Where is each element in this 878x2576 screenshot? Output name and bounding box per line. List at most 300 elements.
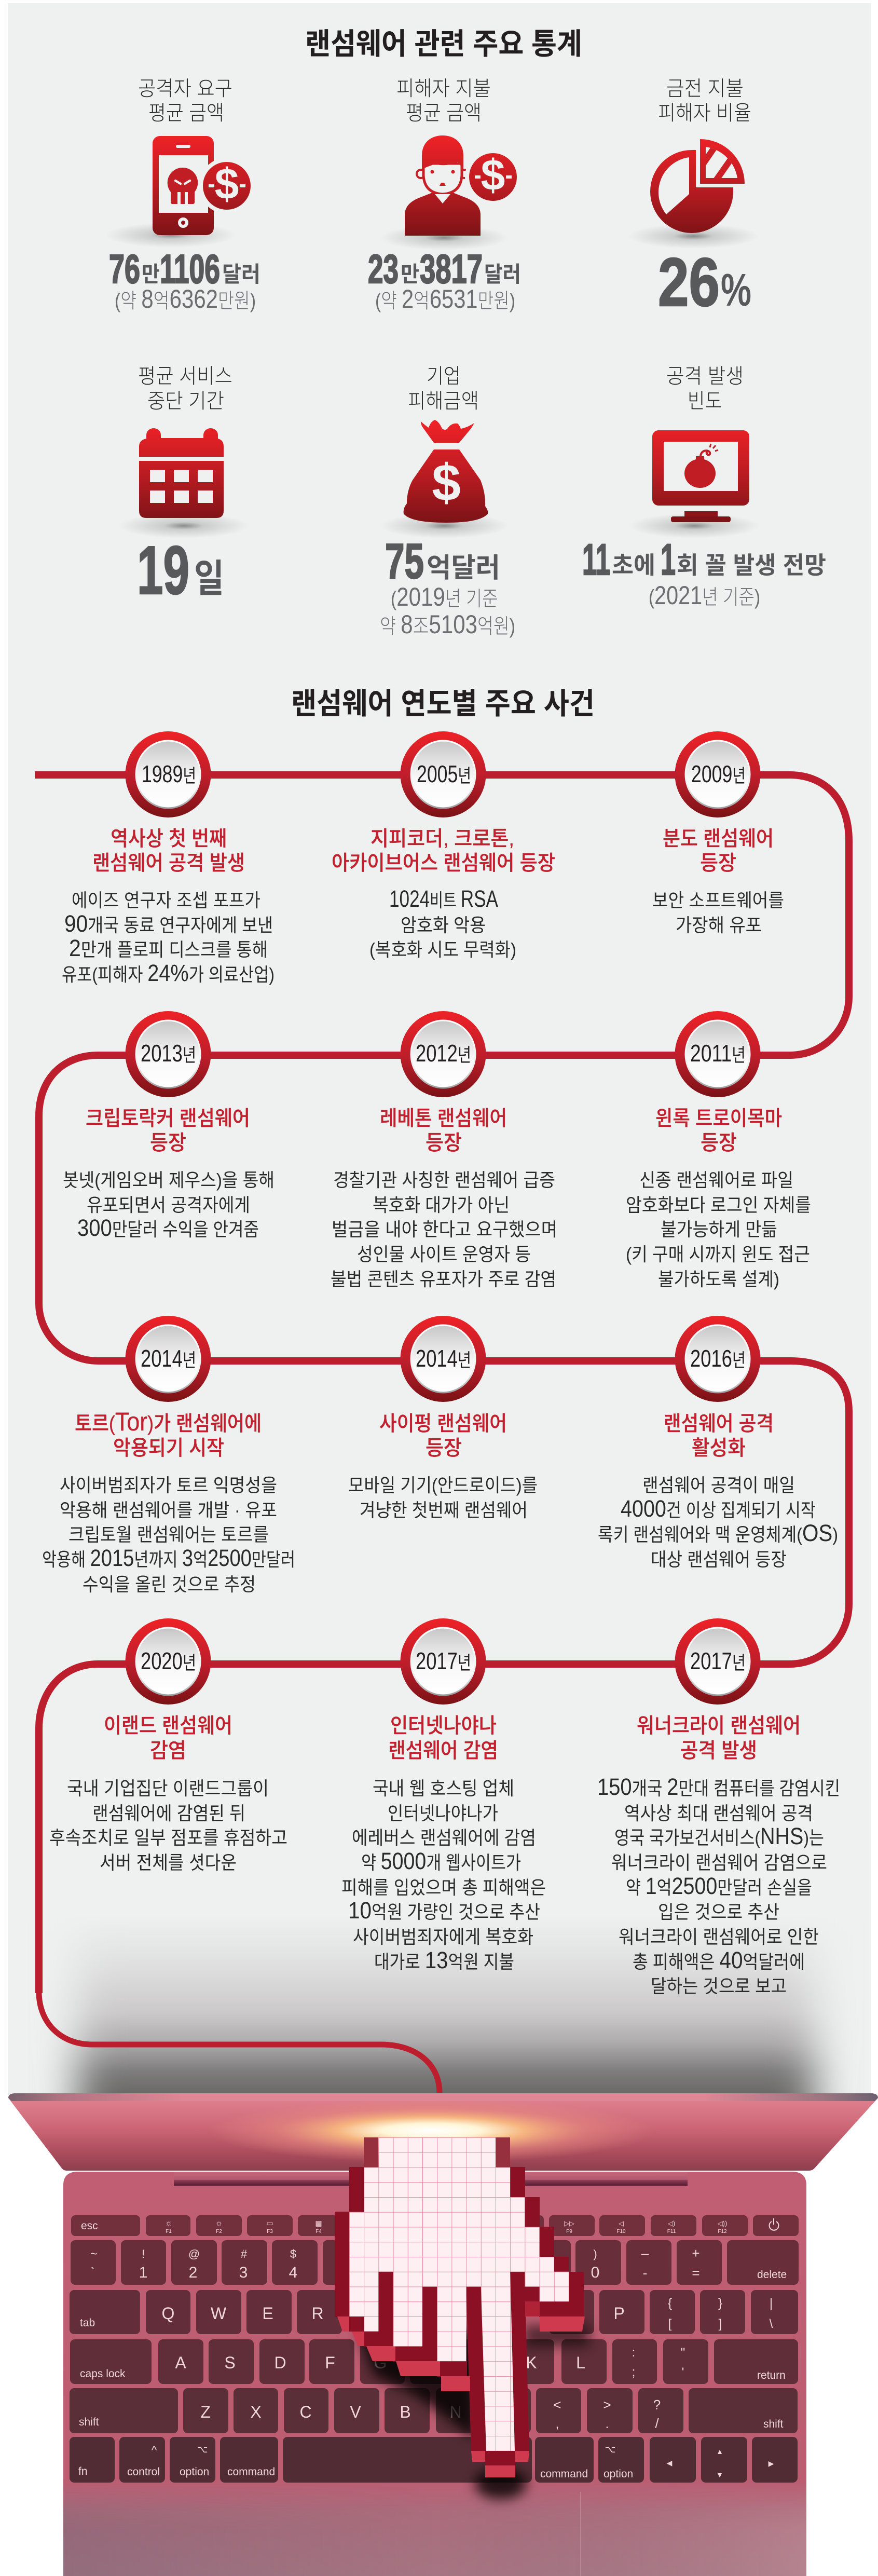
key labels: ~	[90, 2247, 98, 2261]
key labels: ⌥	[605, 2444, 615, 2455]
description	[49, 1778, 287, 1873]
event: 2017 Erebus	[341, 1618, 546, 1973]
icon: calendar	[118, 428, 249, 538]
title: 이랜드 랜섬웨어	[104, 1714, 232, 1737]
event: 2005	[332, 731, 555, 960]
year badge	[675, 1011, 761, 1097]
year badge: 2012년	[416, 1040, 471, 1067]
laptop lid	[8, 2093, 878, 2171]
key labels: X	[250, 2403, 262, 2421]
description	[369, 885, 516, 960]
stat: attack frequency	[582, 365, 826, 610]
key labels: {	[668, 2296, 672, 2310]
description: 모바일 기기(안드로이드)를	[348, 1475, 538, 1496]
description: 국내 웹 호스팅 업체	[373, 1778, 514, 1799]
hand white pixels	[349, 2137, 569, 2451]
description: 에이즈 연구자 조셉 포프가	[72, 890, 260, 911]
key labels: command	[227, 2466, 275, 2478]
value note: (2019년 기준	[391, 582, 498, 611]
label	[396, 77, 491, 125]
value: 23	[368, 246, 399, 292]
description: 복호화 대가가 아닌	[373, 1194, 510, 1216]
description: 랜섬웨어에 감염된 뒤	[92, 1803, 245, 1824]
title: 등장	[426, 1132, 462, 1154]
key labels: )	[593, 2247, 597, 2260]
key labels: return	[757, 2369, 786, 2381]
value: 초에	[612, 552, 655, 579]
title: 지피코더, 크로톤,	[371, 827, 514, 850]
description: 인터넷나야나가	[388, 1803, 498, 1824]
key labels: ▷▷	[564, 2219, 574, 2227]
title	[663, 827, 774, 875]
key labels: ^	[152, 2444, 157, 2457]
description	[626, 1169, 811, 1290]
hand shadow	[358, 2325, 589, 2499]
description: 봇넷(게임오버 제우스)을 통해	[63, 1169, 275, 1191]
icon: pie chart	[638, 139, 748, 247]
value in won: (약 8억6362만원)	[115, 284, 256, 314]
description: 크립토월 랜섬웨어는 토르를	[68, 1524, 269, 1545]
key labels: =	[692, 2265, 700, 2281]
key labels: 4	[289, 2264, 297, 2281]
description: 사이버범죄자에게 복호화	[353, 1926, 533, 1947]
description: 악용해 2015년까지 3억2500만달러	[42, 1545, 295, 1571]
key labels: !	[142, 2247, 145, 2260]
key labels: option	[603, 2468, 633, 2480]
key labels: F2	[216, 2229, 222, 2234]
description: 4000건 이상 집계되기 시작	[621, 1495, 816, 1522]
key labels: 3	[239, 2264, 248, 2281]
title: 토르(Tor)가 랜섬웨어에	[75, 1407, 262, 1436]
description: 달하는 것으로 보고	[651, 1975, 787, 1997]
description: 랜섬웨어 공격이 매일	[642, 1475, 795, 1496]
value: 11	[582, 535, 610, 584]
key labels: ◁	[619, 2219, 624, 2227]
year badge	[675, 731, 761, 817]
description: (복호화 시도 무력화)	[369, 939, 516, 960]
description: 겨냥한 첫번째 랜섬웨어	[360, 1500, 528, 1521]
description: 영국 국가보건서비스(NHS)는	[614, 1823, 824, 1849]
key labels: :	[632, 2346, 635, 2360]
key labels: /	[655, 2416, 659, 2431]
value: 달러	[484, 262, 521, 287]
year badge	[401, 1316, 486, 1402]
description	[341, 1778, 546, 1973]
value note	[380, 582, 515, 639]
description: 피해를 입었으며 총 피해액은	[341, 1877, 546, 1898]
value: 76	[109, 246, 140, 292]
key labels: –	[641, 2245, 649, 2261]
title	[664, 1412, 774, 1460]
title: 활성화	[692, 1437, 746, 1460]
label: 피해자 비율	[658, 102, 751, 125]
hand side walls	[335, 2137, 584, 2466]
key labels: Z	[200, 2403, 211, 2421]
key labels: ▦	[315, 2219, 322, 2227]
description: 에레버스 랜섬웨어에 감염	[352, 1827, 536, 1848]
value: 만	[401, 262, 419, 287]
label: 공격 발생	[666, 365, 744, 388]
icon: money bag: $	[432, 454, 461, 512]
value: 1106	[160, 246, 220, 292]
year badge: 2017년	[416, 1647, 471, 1674]
value: %	[721, 264, 751, 316]
key labels: ;	[632, 2365, 635, 2379]
description	[42, 1475, 295, 1595]
key labels: esc	[81, 2220, 98, 2232]
title: 윈록 트로이목마	[655, 1107, 782, 1130]
title: 공격 발생	[680, 1739, 757, 1762]
key labels: G	[374, 2353, 387, 2372]
value: 1	[661, 535, 676, 584]
description	[62, 890, 275, 986]
description	[331, 1169, 557, 1290]
key labels: "	[681, 2346, 685, 2360]
icon: phone with skull and dollar	[105, 136, 255, 248]
label: 평균 금액	[406, 102, 482, 125]
key labels: ▲	[716, 2447, 723, 2456]
key labels: ,	[556, 2417, 559, 2431]
key labels: command	[540, 2468, 588, 2480]
label: 중단 기간	[147, 390, 224, 413]
key labels: F4	[315, 2229, 322, 2234]
description	[63, 1169, 275, 1241]
key labels: tab	[80, 2317, 95, 2329]
key labels: W	[211, 2304, 227, 2323]
description: 불가능하게 만듦	[661, 1219, 777, 1240]
year badge: 2017년	[690, 1647, 746, 1674]
icon: person with dollar: $	[481, 151, 505, 199]
description	[597, 1774, 840, 1997]
year badge: 2020년	[141, 1647, 196, 1674]
description: 워너크라이 랜섬웨어 감염으로	[611, 1852, 827, 1873]
key labels: |	[770, 2296, 773, 2310]
key labels: shift	[79, 2416, 99, 2428]
description: 보안 소프트웨어를	[652, 890, 784, 911]
description	[598, 1475, 838, 1570]
year badge	[126, 1316, 211, 1402]
key labels: +	[692, 2245, 700, 2261]
description: 록키 랜섬웨어와 맥 운영체계(OS)	[598, 1520, 838, 1546]
description: 역사상 최대 랜섬웨어 공격	[624, 1803, 813, 1824]
key labels: $	[290, 2247, 296, 2260]
label: 기업	[427, 365, 461, 388]
description: 2만개 플로피 디스크를 통해	[69, 935, 268, 961]
title: 인터넷나야나	[390, 1714, 497, 1737]
title: 크립토락커 랜섬웨어	[86, 1107, 250, 1130]
year badge	[401, 1011, 486, 1097]
title: 악용되기 시작	[113, 1437, 224, 1460]
title: 사이펑 랜섬웨어	[379, 1412, 507, 1435]
event: 2020	[49, 1618, 287, 1873]
value	[368, 246, 521, 292]
description: 워너크라이 랜섬웨어로 인한	[619, 1926, 819, 1947]
year badge: 2016년	[690, 1345, 746, 1372]
event: 2016	[598, 1316, 838, 1570]
value	[385, 534, 500, 589]
key labels: ◀	[667, 2459, 673, 2467]
title	[379, 1412, 507, 1460]
key labels: ☼	[215, 2219, 223, 2228]
key labels: E	[262, 2304, 273, 2323]
event: 2009	[652, 731, 784, 936]
title: 역사상 첫 번째	[111, 827, 227, 850]
title	[388, 1714, 498, 1762]
label	[408, 365, 479, 413]
description: 암호화보다 로그인 자체를	[626, 1194, 811, 1216]
title	[86, 1107, 250, 1154]
event: 2017 WannaCry	[597, 1618, 840, 1997]
shadow above laptop	[78, 1915, 815, 2093]
description: 국내 기업집단 이랜드그룹이	[67, 1778, 269, 1799]
title: 등장	[701, 1132, 737, 1154]
key labels: 0	[591, 2264, 599, 2281]
description: 90개국 동료 연구자에게 보낸	[64, 910, 273, 937]
key labels: ⌥	[197, 2444, 208, 2455]
title	[637, 1714, 801, 1762]
value: 억달러	[427, 553, 500, 583]
stat: average downtime	[118, 365, 249, 608]
title: 등장	[700, 852, 736, 875]
description: 암호화 악용	[401, 915, 486, 936]
event: 2013	[63, 1011, 275, 1241]
event: 2011	[626, 1011, 811, 1290]
icon: monitor with bomb	[629, 430, 760, 538]
key labels: }	[718, 2296, 722, 2310]
key labels: R	[311, 2304, 324, 2323]
label	[666, 365, 744, 413]
year badge: 2013년	[141, 1040, 196, 1067]
description: 유포(피해자 24%가 의료산업)	[62, 960, 275, 986]
title: 등장	[426, 1437, 462, 1460]
description: 150개국 2만대 컴퓨터를 감염시킨	[597, 1774, 840, 1800]
description: 입은 것으로 추산	[658, 1901, 779, 1923]
panel: background	[8, 3, 871, 2095]
description: 불법 콘텐츠 유포자가 주로 감염	[331, 1269, 556, 1290]
label: 빈도	[688, 390, 722, 413]
key labels: -	[643, 2265, 647, 2281]
key labels: F11	[667, 2229, 676, 2234]
key labels: F3	[267, 2229, 273, 2234]
description	[652, 890, 784, 936]
title: 랜섬웨어 공격 발생	[92, 852, 245, 875]
icon: pixel hand cursor	[335, 2137, 589, 2499]
value in won: (약 2억6531만원)	[375, 284, 515, 314]
key labels: '	[682, 2365, 684, 2379]
description: 불가하도록 설계)	[658, 1269, 779, 1290]
key labels: \	[770, 2317, 773, 2331]
description: 300만달러 수익을 안겨줌	[77, 1215, 259, 1241]
title: 워너크라이 랜섬웨어	[637, 1714, 801, 1737]
key labels: @	[188, 2247, 200, 2260]
year badge	[675, 1316, 761, 1402]
key labels: F	[325, 2353, 335, 2372]
value note: 약 8조5103억원)	[380, 610, 515, 639]
title	[655, 1107, 782, 1154]
value: 일	[194, 557, 224, 600]
description: 약 5000개 웹사이트가	[361, 1848, 521, 1874]
description: 수익을 올린 것으로 추정	[83, 1574, 256, 1595]
event: 1989	[62, 731, 275, 986]
label: 피해금액	[408, 390, 479, 413]
description: 가장해 유포	[676, 915, 762, 936]
key labels: caps lock	[80, 2368, 126, 2380]
value: 26	[658, 244, 720, 320]
title: 랜섬웨어 공격	[664, 1412, 774, 1435]
year badge: 1989년	[142, 760, 196, 787]
value: 달러	[222, 262, 260, 287]
title: 감염	[150, 1739, 186, 1762]
year badge: 2009년	[691, 760, 746, 787]
key labels: C	[299, 2403, 312, 2421]
icon: phone with skull and dollar: $	[215, 159, 239, 208]
description: 서버 전체를 셧다운	[100, 1852, 237, 1873]
stat: average ransom demanded	[105, 77, 260, 314]
key labels: shift	[763, 2418, 784, 2430]
icon: money bag	[380, 420, 509, 538]
label	[138, 77, 232, 125]
stat: average paid by victims	[368, 77, 521, 314]
key labels: [	[668, 2317, 672, 2331]
label: 평균 금액	[148, 102, 224, 125]
keyboard	[70, 2215, 799, 2483]
description: 약 1억2500만달러 손실을	[626, 1873, 812, 1899]
value: 3817	[420, 246, 483, 292]
key labels	[78, 2218, 787, 2480]
key labels: P	[613, 2304, 625, 2323]
key labels: ▼	[716, 2471, 723, 2479]
value: 19	[137, 532, 189, 608]
key labels: ◁)	[668, 2219, 675, 2227]
description: 대상 랜섬웨어 등장	[651, 1549, 787, 1570]
key labels: 1	[139, 2264, 147, 2281]
key labels: option	[180, 2466, 209, 2478]
title: 분도 랜섬웨어	[663, 827, 774, 850]
year badge	[401, 1618, 486, 1705]
key labels: #	[241, 2247, 248, 2260]
key labels: S	[224, 2353, 236, 2372]
key labels: B	[400, 2403, 411, 2421]
description: 후속조치로 일부 점포를 휴점하고	[49, 1827, 287, 1848]
year badge	[401, 731, 486, 817]
description: 10억원 가량인 것으로 추산	[348, 1897, 540, 1924]
year badge	[126, 1618, 211, 1705]
description: (키 구매 시까지 윈도 접근	[626, 1244, 810, 1265]
event: 2012	[331, 1011, 557, 1290]
title	[332, 827, 555, 875]
key labels: ◁))	[718, 2219, 727, 2227]
key labels: >	[603, 2397, 611, 2413]
value note: (2021년 기준)	[649, 581, 760, 610]
title	[380, 1107, 507, 1154]
description: 유포되면서 공격자에게	[87, 1194, 250, 1216]
key labels: ]	[719, 2317, 722, 2331]
key labels: V	[350, 2403, 361, 2421]
label: 금전 지불	[666, 77, 744, 100]
description: 성인물 사이트 운영자 등	[357, 1244, 531, 1265]
year badge	[126, 1011, 211, 1097]
key labels: F1	[166, 2229, 172, 2234]
year badge	[675, 1618, 761, 1705]
key labels: .	[606, 2417, 609, 2431]
description: 사이버범죄자가 토르 익명성을	[60, 1475, 277, 1496]
value: 만	[142, 262, 160, 287]
heading: timeline: 랜섬웨어 연도별 주요 사건	[291, 687, 595, 720]
key labels: ?	[653, 2397, 661, 2413]
key labels: ☼	[165, 2219, 172, 2228]
description	[348, 1475, 538, 1521]
year badge: 2011년	[690, 1040, 746, 1067]
event: 2014 Tor	[42, 1316, 295, 1595]
key labels: ▶	[769, 2459, 774, 2468]
illustration: laptop	[8, 2093, 878, 2576]
year badge: 2014년	[416, 1345, 471, 1372]
key labels: F9	[566, 2229, 572, 2234]
value: 회 꼴 발생 전망	[677, 552, 826, 579]
key labels: 2	[189, 2264, 197, 2281]
key labels: D	[274, 2353, 286, 2372]
key labels: Q	[162, 2304, 174, 2323]
value	[582, 535, 826, 584]
label: 평균 서비스	[138, 365, 232, 388]
value: 75	[385, 534, 424, 589]
key labels: K	[526, 2353, 537, 2372]
title: 랜섬웨어 감염	[388, 1739, 498, 1762]
title	[104, 1714, 232, 1762]
key caps	[71, 2215, 799, 2236]
label	[658, 77, 751, 125]
description: 악용해 랜섬웨어를 개발 · 유포	[60, 1500, 277, 1521]
label: 공격자 요구	[138, 77, 232, 100]
key labels: F10	[616, 2229, 626, 2234]
description: 경찰기관 사칭한 랜섬웨어 급증	[333, 1169, 555, 1191]
year badge	[126, 731, 211, 817]
title: 아카이브어스 랜섬웨어 등장	[332, 852, 555, 875]
year badge: 2005년	[417, 760, 471, 787]
description: 총 피해액은 40억달러에	[633, 1947, 805, 1973]
key labels: N	[449, 2403, 462, 2421]
key labels: A	[175, 2353, 186, 2372]
heading: statistics: 랜섬웨어 관련 주요 통계	[305, 28, 582, 61]
event: 2014 Simplocker	[348, 1316, 538, 1521]
title: 레베톤 랜섬웨어	[380, 1107, 507, 1130]
hand highlight edges	[337, 2301, 585, 2477]
description: 벌금을 내야 한다고 요구했으며	[332, 1219, 557, 1240]
description: 대가로 13억원 지불	[374, 1947, 514, 1973]
title	[75, 1407, 262, 1460]
year badge: 2014년	[141, 1345, 196, 1372]
key labels: F12	[718, 2229, 727, 2234]
stat: share of victims who paid	[638, 78, 750, 307]
key labels: `	[91, 2266, 95, 2280]
key labels: fn	[78, 2465, 88, 2477]
label: 피해자 지불	[396, 77, 491, 100]
key labels: <	[553, 2397, 561, 2413]
icon: person with dollar	[380, 135, 521, 250]
description: 신종 랜섬웨어로 파일	[639, 1169, 793, 1191]
stat: corporate damage	[380, 365, 515, 639]
timeline connector line	[35, 775, 849, 2093]
key labels: ▭	[266, 2219, 273, 2227]
value	[109, 246, 260, 292]
title: 등장	[150, 1132, 186, 1154]
label	[138, 365, 232, 413]
key labels: control	[127, 2466, 160, 2478]
description: 1024비트 RSA	[389, 885, 498, 912]
key labels: delete	[757, 2269, 787, 2281]
laptop base	[63, 2172, 806, 2576]
key labels: L	[576, 2353, 585, 2372]
